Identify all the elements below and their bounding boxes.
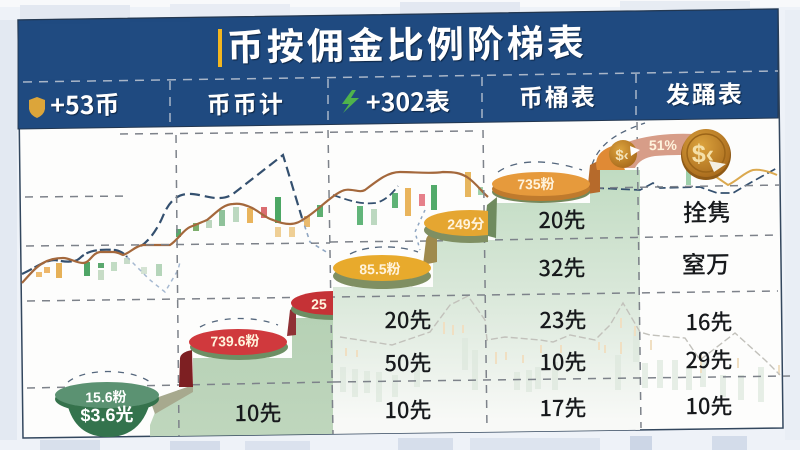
title: 币按佣金比例阶梯表	[226, 13, 587, 71]
step 3 label: 25	[311, 296, 327, 312]
step 4: yellow disk	[333, 255, 431, 289]
title accent bar	[218, 29, 222, 67]
header texture	[40, 12, 700, 79]
column 5 values: 窒万	[682, 245, 730, 280]
step 1: green bowl	[55, 382, 159, 437]
column header 5: 发踊表	[666, 74, 744, 111]
icon: lightning	[342, 90, 359, 113]
column 3 values: 50先	[384, 346, 432, 378]
column 5 values: 16先	[685, 305, 733, 337]
icon: shield	[29, 97, 45, 118]
column 5 values: 拴隽	[683, 193, 731, 228]
step 6: orange disk	[492, 172, 590, 203]
chart: gold line right	[706, 170, 777, 185]
chart: brown trend line	[22, 172, 488, 283]
chart: navy dashed lines	[22, 123, 777, 382]
column 5 values: 10先	[685, 389, 733, 421]
table grid lines	[25, 122, 790, 436]
panel: header band	[18, 9, 778, 129]
step 1 label: 15.6粉	[85, 389, 127, 405]
column header 2: 币币计	[207, 84, 285, 121]
column 3 values	[384, 303, 432, 425]
column 2 values: 10先	[234, 396, 282, 428]
column 4 values: 32先	[538, 251, 586, 283]
top ribbon with percentage	[596, 134, 700, 170]
column 3 values: 10先	[384, 393, 432, 425]
step 6 label: 735粉	[517, 176, 555, 192]
chart: faint grey trend line	[340, 296, 780, 375]
step 3: red disk cut by column	[291, 291, 333, 320]
step 2: red disk	[189, 329, 288, 360]
column header 4: 币桶表	[519, 77, 597, 114]
chart: faint orange ticks	[345, 318, 780, 375]
step connectors	[150, 160, 600, 414]
icon: small coin: $‹	[615, 147, 629, 164]
icon: large coin	[681, 129, 731, 180]
header grid lines	[23, 71, 778, 128]
step 5: yellow disk cut by column	[424, 210, 488, 243]
step 5 label: 249分	[447, 216, 485, 232]
column 3 values: 20先	[384, 303, 432, 335]
step 4 label: 85.5粉	[359, 261, 401, 277]
ribbon percent label: 51%	[649, 137, 678, 153]
column header 1: +53币	[50, 86, 120, 122]
column header 3: +302表	[366, 82, 450, 120]
column 4 values: 23先	[539, 303, 587, 335]
chart: stepped green area	[150, 170, 640, 438]
step 2 label: 739.6粉	[210, 333, 260, 349]
column 5 values	[682, 193, 733, 421]
column 4 values	[538, 203, 587, 423]
column 4 values: 10先	[539, 345, 587, 377]
chart: faint lower candlesticks	[340, 330, 764, 402]
column 4 values: 20先	[538, 203, 586, 235]
column 4 values: 17先	[539, 391, 587, 423]
icon: large coin: $‹	[692, 140, 714, 168]
chart: upper candlesticks	[36, 170, 691, 280]
column 5 values: 29先	[685, 343, 733, 375]
step 1 amount: $3.6光	[80, 405, 134, 425]
